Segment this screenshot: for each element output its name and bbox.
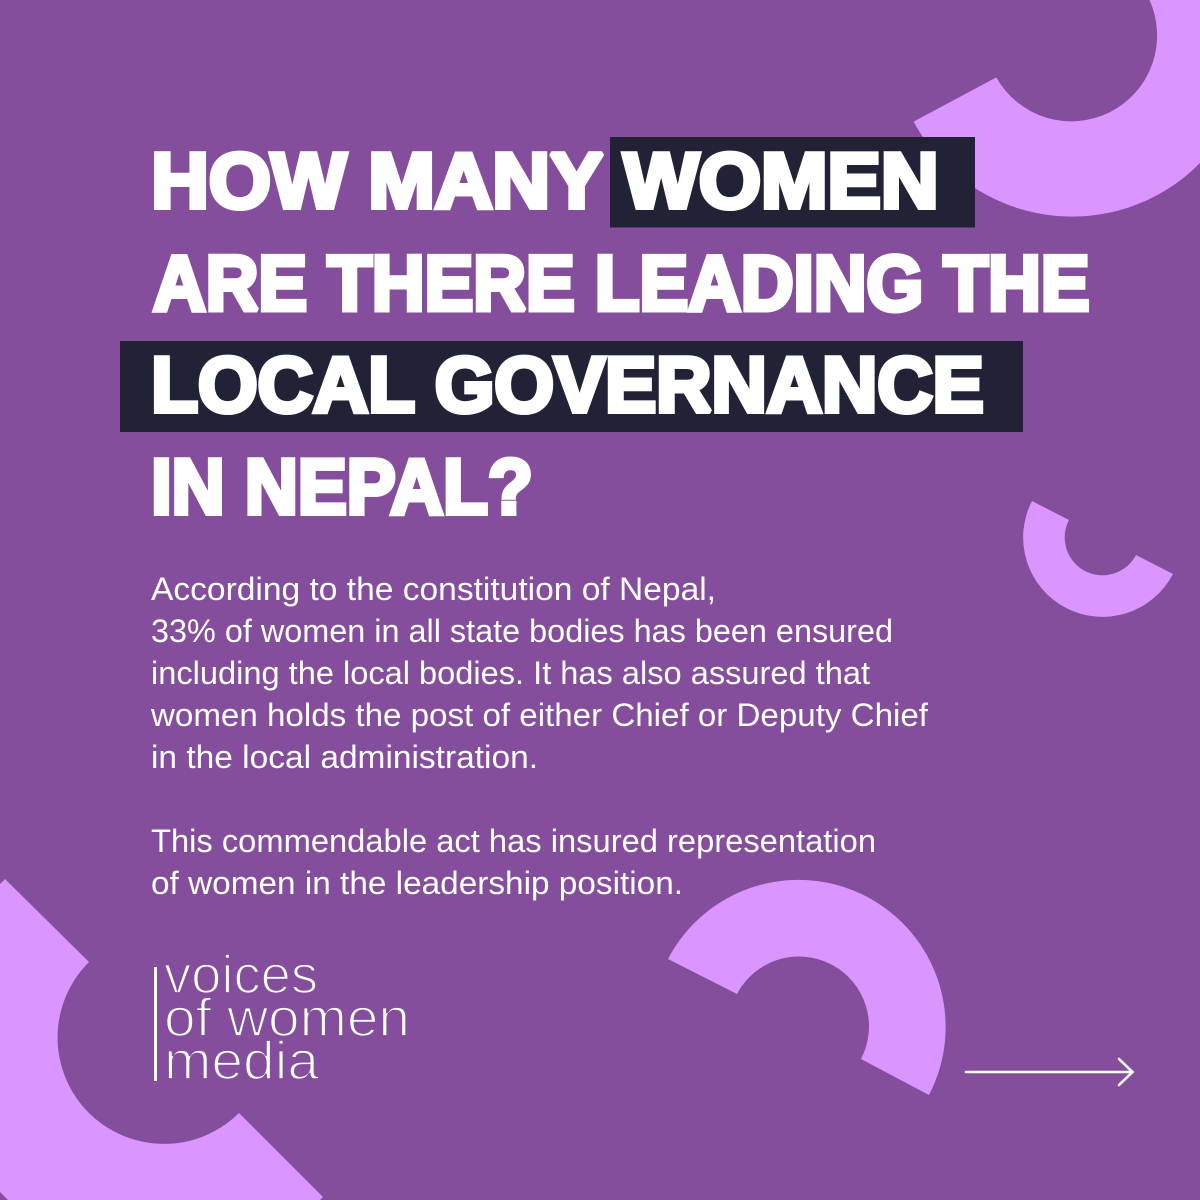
- title: [151, 136, 1090, 530]
- logo: voices of women media: of women: [164, 988, 410, 1048]
- body paragraph: constitution: [150, 571, 928, 775]
- title: LOCAL GOVERNANCE: [151, 340, 984, 428]
- logo: voices of women media: [154, 945, 410, 1091]
- body paragraph: representation: This commendable act has insured representation: [151, 823, 876, 859]
- body paragraph: representation: [151, 823, 876, 901]
- shape: bottom left half ring: [0, 879, 323, 1200]
- body paragraph: constitution: 33% of women in all state bodies has been ensured: [151, 613, 893, 649]
- title: WOMEN: [624, 136, 938, 224]
- logo: voices of women media: voices: [164, 945, 318, 1005]
- body paragraph: constitution: women holds the post of either Chief or Deputy Chief: [150, 697, 928, 733]
- body paragraph: constitution: including the local bodies. It has also assured that: [151, 655, 870, 691]
- highlight box: women: [610, 137, 975, 228]
- title: HOW MANY: [151, 136, 603, 224]
- body paragraph: representation: of women in the leadership position.: [151, 865, 683, 901]
- body paragraph: constitution: According to the constitution of Nepal,: [151, 571, 716, 607]
- highlight box: local governance: [120, 341, 1023, 432]
- arrow: [966, 1059, 1132, 1085]
- title: ARE THERE LEADING THE: [153, 239, 1090, 327]
- logo: voices of women media: media: [164, 1031, 320, 1091]
- title: IN NEPAL?: [151, 442, 533, 530]
- body paragraph: constitution: in the local administration.: [151, 739, 538, 775]
- shape: small right half ring: [1023, 501, 1173, 617]
- shape: top right half ring: [914, 0, 1200, 217]
- shape: bottom centre half ring: [668, 880, 946, 1095]
